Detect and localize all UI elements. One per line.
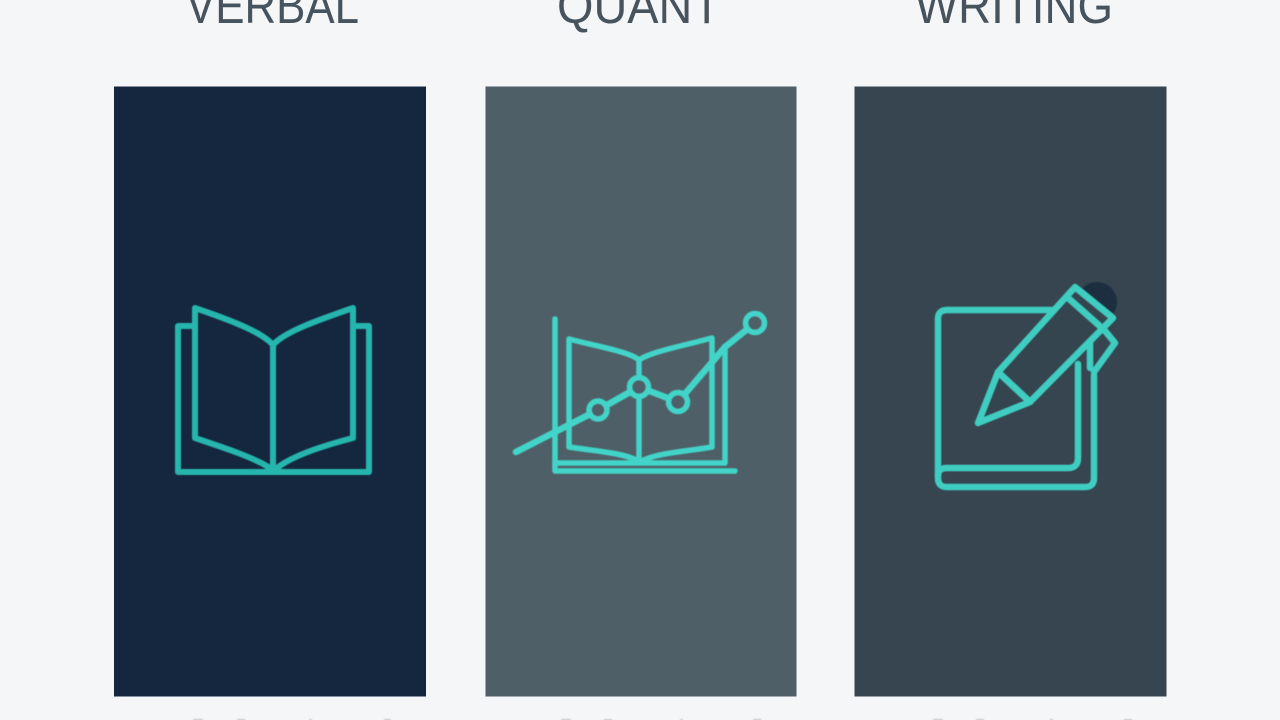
- panel: verbal: [114, 86, 426, 696]
- icon: notebook and pencil: [938, 282, 1117, 487]
- icon: book with rising chart: [516, 314, 764, 471]
- panel: quant: [486, 86, 796, 696]
- icon: open book: [178, 308, 369, 472]
- cropped caption: verbal: [193, 719, 391, 720]
- cropped caption: quant: [561, 719, 761, 720]
- panel: writing: [854, 86, 1166, 696]
- cropped caption: writing: [933, 719, 1132, 720]
- pencil cap shadow: [1077, 282, 1117, 322]
